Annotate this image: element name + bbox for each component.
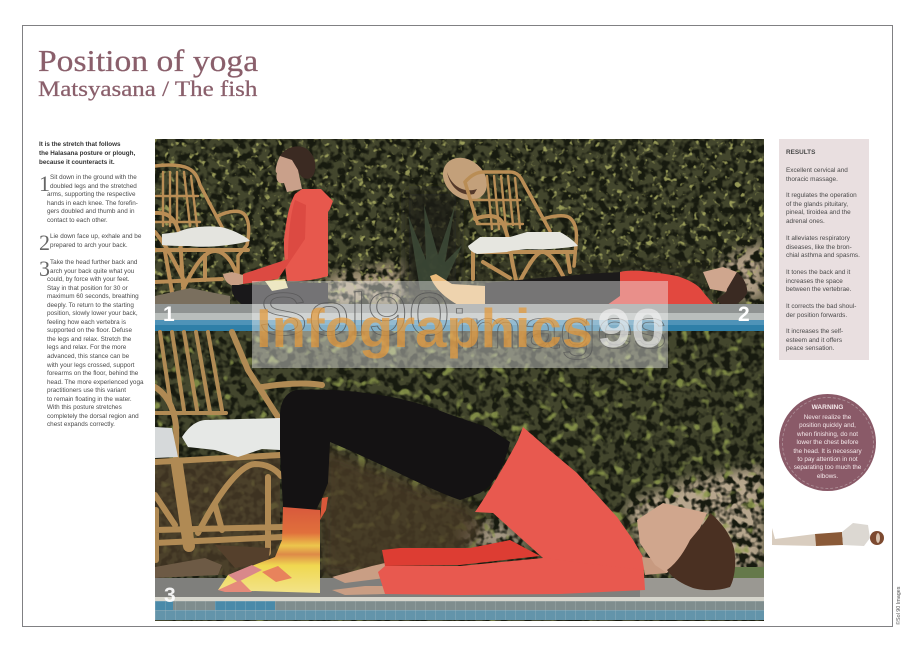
warning circle: [779, 394, 876, 491]
pool edge strip: [155, 304, 764, 331]
result 3: chial asthma and spasms.: [786, 252, 860, 259]
step 3 text: head. The more experienced yoga: [47, 379, 144, 386]
ground stone: [155, 288, 230, 306]
result 4: between the vertebrae.: [786, 286, 851, 293]
step 3 text: forearms on the floor, behind the: [47, 370, 138, 377]
watermark: Sol90: [258, 281, 450, 348]
photo 1: seated pose: [155, 146, 333, 309]
photo composite: three yoga poses: [155, 139, 764, 621]
step 3 text: deeply. To return to the starting: [47, 302, 134, 309]
step 1 text: gers doubled and thumb and in: [47, 208, 134, 215]
step 2 number: 2: [39, 230, 50, 255]
ivy background: [155, 139, 765, 621]
step 2 text: [50, 233, 142, 249]
step 3 text: could, by force with your feet.: [47, 276, 130, 283]
step 1 text: hands in each knee. The forefin-: [47, 200, 138, 207]
step 3 text: With this posture stretches: [47, 404, 122, 411]
image credit: ©Sol 90 Images: [896, 587, 902, 625]
photo 3: bridge pose: [155, 332, 764, 620]
result 4: [786, 269, 851, 293]
step 3 text: Stay in that position for 30 or: [47, 285, 128, 292]
warning heading: WARNING: [812, 404, 843, 411]
step 3 text: completely the dorsal region and: [47, 413, 139, 420]
warning text: separating too much the: [794, 464, 861, 471]
lying woman: [430, 267, 747, 310]
pool tiles: [155, 597, 764, 620]
warning text: elbows.: [817, 473, 838, 480]
result 6: It increases the self-: [786, 328, 843, 335]
step 2 text: Lie down face up, exhale and be: [50, 233, 141, 240]
result 2: It regulates the operation: [786, 192, 857, 199]
watermark: [252, 281, 668, 368]
photo number 3: 3: [164, 584, 176, 607]
step 3 text: feeling how each vertebra is: [47, 319, 126, 326]
warning text: Never realize the: [804, 414, 851, 421]
result 5: [786, 303, 856, 318]
result 2: pineal, tiroidea and the: [786, 209, 851, 216]
result 5: der position forwards.: [786, 312, 847, 318]
result 2: [786, 192, 857, 224]
warning text: when finishing, do not: [797, 431, 858, 438]
step 3 text: arch your back quite what you: [50, 268, 134, 275]
icon: fish pose figure: [772, 523, 884, 546]
result 1: Excellent cervical and: [786, 167, 848, 174]
result 4: It tones the back and it: [786, 269, 850, 276]
ground wood: [155, 558, 222, 578]
step 3 text: the legs and relax. Stretch the: [47, 336, 131, 343]
subtitle: Matsyasana / The fish: [38, 76, 257, 101]
step 2 text: prepared to arch your back.: [50, 242, 128, 249]
result 6: [786, 328, 843, 352]
result 1: thoracic massage.: [786, 176, 838, 182]
chair cushion: [182, 418, 280, 457]
intro text: It is the stretch that follows: [39, 141, 121, 148]
step 3 text: maximum 60 seconds, breathing: [47, 293, 139, 300]
step 3 text: with your legs crossed, support: [47, 362, 134, 369]
photo 2: lying pose: [408, 149, 747, 310]
seated woman: [223, 146, 333, 309]
result 6: esteem and it offers: [786, 336, 842, 344]
chair cushion: [162, 226, 250, 247]
photo number 2: 2: [738, 303, 750, 326]
wicker chair: [465, 172, 576, 281]
warning text: lower the chest before: [797, 439, 858, 446]
result 2: of the glands pituitary,: [786, 200, 848, 208]
watermark: images: [452, 298, 667, 360]
watermark: Infographics: [256, 297, 593, 359]
results heading: RESULTS: [786, 149, 815, 156]
step 3 text: chest expands correctly.: [47, 421, 115, 428]
step 1 text: contact to each other.: [47, 217, 108, 224]
step 3 text: legs and relax. For the more: [47, 344, 126, 351]
agave plant: [408, 205, 462, 290]
results panel: [779, 139, 869, 360]
step 3: [39, 256, 144, 428]
warning text: [793, 414, 862, 480]
step 1 text: arms, supporting the respective: [47, 191, 136, 198]
step 3 text: position, slowly lower your back,: [47, 310, 138, 317]
result 3: diseases, like the bron-: [786, 244, 852, 250]
step 3 text: Take the head further back and: [50, 259, 137, 266]
warning text: position quickly and,: [799, 422, 856, 429]
photo number 1: 1: [163, 303, 175, 326]
watermark: 90: [597, 297, 665, 359]
result 2: adrenal ones.: [786, 218, 825, 224]
step 1 text: [47, 174, 138, 224]
result 4: increases the space: [786, 278, 843, 284]
step 1 text: doubled legs and the stretched: [50, 183, 137, 190]
result 3: It alleviates respiratory: [786, 235, 850, 242]
bridge woman: [218, 390, 735, 595]
step 1: [39, 171, 138, 224]
step 2: [39, 230, 142, 255]
result 6: peace sensation.: [786, 345, 834, 352]
result 5: It corrects the bad shoul-: [786, 303, 856, 310]
step 1 text: Sit down in the ground with the: [50, 174, 137, 181]
warning ring: [782, 397, 874, 489]
warning text: to pay attention in not: [797, 456, 858, 463]
floor slab: [155, 578, 764, 597]
step 3 text: supported on the floor. Defuse: [47, 327, 132, 334]
title: Position of yoga: [38, 43, 258, 78]
result 1: [786, 167, 848, 182]
step 3 text: advanced, this stance can be: [47, 353, 129, 360]
wicker chair: [155, 332, 322, 560]
intro text: because it counteracts it.: [39, 159, 115, 166]
straw hat: [434, 149, 496, 209]
step 1 number: 1: [39, 171, 50, 196]
intro text: [39, 141, 135, 166]
step 3 number: 3: [39, 256, 50, 281]
result 3: [786, 235, 860, 259]
chair shadow: [155, 455, 280, 575]
intro text: the Halasana posture or plough,: [39, 150, 135, 157]
chair cushion: [468, 232, 578, 254]
step 3 text: [47, 259, 144, 428]
warning text: the head. It is necessary: [793, 448, 862, 455]
step 3 text: to remain floating in the water.: [47, 396, 132, 403]
step 3 text: practitioners use this variant: [47, 387, 126, 394]
wicker chair: [155, 165, 249, 292]
